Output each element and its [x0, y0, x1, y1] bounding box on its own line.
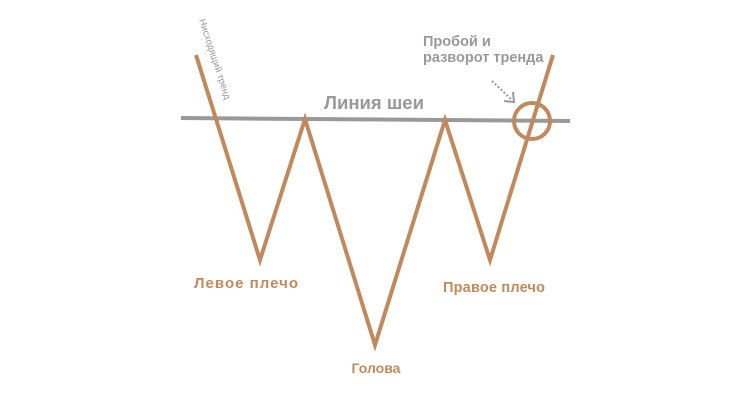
left shoulder label: Левое плечо — [194, 275, 298, 292]
breakout label: Пробой и — [423, 34, 491, 50]
breakout label: разворот тренда — [423, 50, 544, 66]
neckline label: Линия шеи — [324, 92, 424, 113]
head label: Голова — [352, 360, 401, 376]
downtrend label: Нисходящий тренд — [196, 18, 233, 101]
right shoulder label: Правое плечо — [443, 280, 545, 296]
arrow dotted — [492, 81, 514, 102]
neckline — [181, 118, 570, 121]
breakout circle — [514, 103, 550, 139]
price line zigzag — [196, 55, 553, 345]
breakout label — [423, 34, 544, 66]
